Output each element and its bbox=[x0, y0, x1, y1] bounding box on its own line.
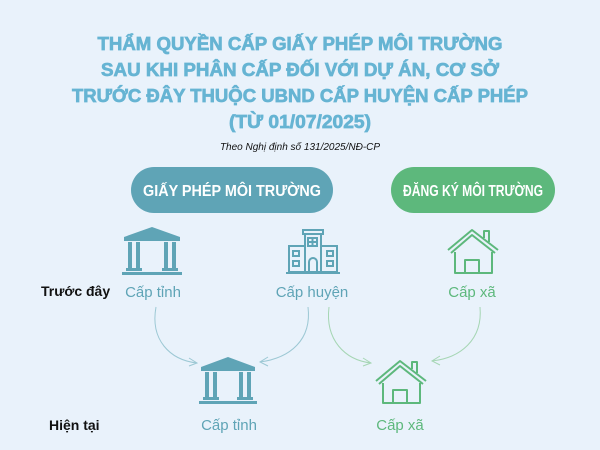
arrows bbox=[155, 307, 480, 366]
icon: house bottom bbox=[376, 361, 426, 403]
labels top row: Cấp huyện bbox=[276, 284, 348, 301]
icon: office building bbox=[286, 230, 340, 273]
pill: đăng ký môi trường bbox=[391, 167, 555, 213]
title: SAU KHI PHÂN CẤP ĐỐI VỚI DỰ ÁN, CƠ SỞ bbox=[101, 59, 500, 80]
labels top row: Cấp xã bbox=[448, 284, 496, 301]
title bbox=[72, 33, 528, 132]
icon: house top bbox=[448, 230, 498, 273]
labels bottom row bbox=[201, 417, 424, 434]
subtitle: Theo Nghị định số 131/2025/NĐ-CP bbox=[220, 141, 380, 153]
title: (TỪ 01/07/2025) bbox=[229, 111, 371, 132]
pill: giấy phép môi trường bbox=[131, 167, 333, 213]
labels bottom row: Cấp tỉnh bbox=[201, 417, 257, 434]
pill: giấy phép môi trường: GIẤY PHÉP MÔI TRƯỜNG bbox=[143, 181, 321, 200]
labels top row bbox=[125, 284, 496, 301]
title: TRƯỚC ĐÂY THUỘC UBND CẤP HUYỆN CẤP PHÉP bbox=[72, 85, 528, 106]
label: hiện tại: Hiện tại bbox=[49, 417, 100, 433]
labels top row: Cấp tỉnh bbox=[125, 284, 181, 301]
pill: đăng ký môi trường: ĐĂNG KÝ MÔI TRƯỜNG bbox=[403, 181, 543, 200]
title: THẨM QUYỀN CẤP GIẤY PHÉP MÔI TRƯỜNG bbox=[98, 33, 502, 54]
icon: temple bottom bbox=[199, 357, 257, 404]
icon: temple top bbox=[122, 227, 182, 275]
labels bottom row: Cấp xã bbox=[376, 417, 424, 434]
label: trước đây: Trước đây bbox=[41, 283, 110, 299]
